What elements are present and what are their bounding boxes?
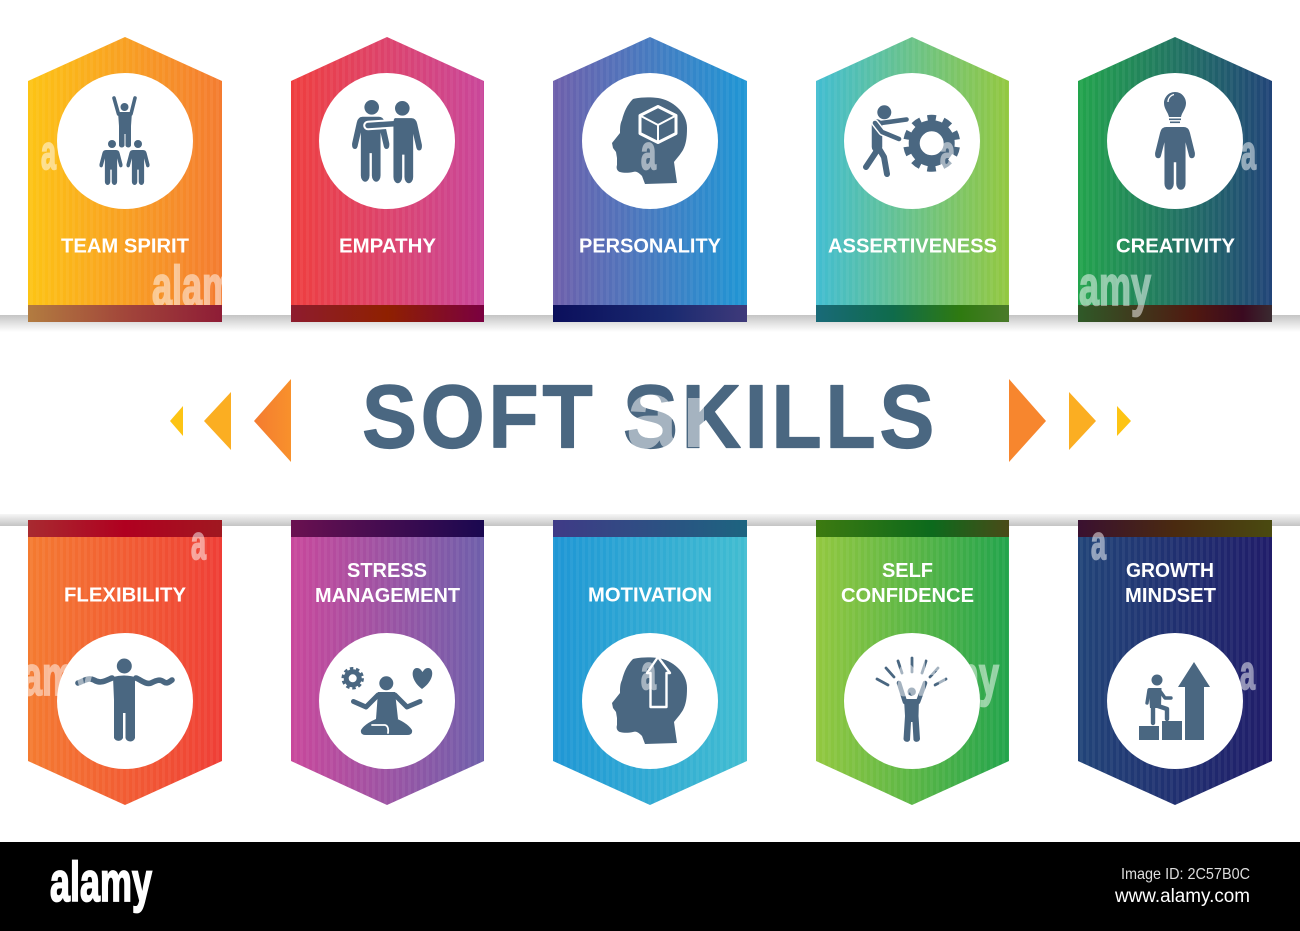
label: self confidence: SELF xyxy=(882,560,933,582)
icon: person pushing gear xyxy=(866,105,961,174)
watermark overlay: a xyxy=(641,127,656,180)
label: motivation: MOTIVATION xyxy=(588,584,712,606)
watermark overlay: a xyxy=(41,127,56,180)
top shadow band xyxy=(0,315,1300,332)
icon: three people stacked xyxy=(99,98,150,185)
panel: stress management xyxy=(291,520,484,805)
label: stress management: MANAGEMENT xyxy=(315,585,460,607)
watermark overlay xyxy=(0,127,1256,707)
watermark overlay: a xyxy=(191,517,206,570)
label: self confidence xyxy=(841,560,974,607)
label: growth mindset: MINDSET xyxy=(1125,585,1216,607)
panel: personality xyxy=(553,37,747,322)
watermark overlay: a xyxy=(1240,647,1255,700)
icon: person with arm around another xyxy=(352,100,422,183)
icon: person raising arms with rays xyxy=(877,658,946,742)
watermark overlay: a xyxy=(940,127,955,180)
label: stress management: STRESS xyxy=(347,560,427,582)
label: self confidence: CONFIDENCE xyxy=(841,585,974,607)
watermark overlay: alamy xyxy=(1049,254,1151,317)
panel: self confidence xyxy=(816,520,1009,805)
label: stress management xyxy=(315,560,460,607)
icon: head with cube xyxy=(612,97,687,184)
watermark overlay: a xyxy=(627,361,678,468)
label: flexibility: FLEXIBILITY xyxy=(64,584,187,606)
panel: assertiveness xyxy=(816,37,1009,322)
label: growth mindset xyxy=(1125,560,1216,607)
label: assertiveness: ASSERTIVENESS xyxy=(828,236,997,258)
panel: empathy xyxy=(291,37,484,322)
icon: person with light bulb head xyxy=(1155,92,1195,190)
label: personality: PERSONALITY xyxy=(579,236,722,258)
footer website: www.alamy.com xyxy=(1114,886,1250,907)
arrows: left chevrons xyxy=(170,379,291,462)
icon: meditating person with gear and heart xyxy=(343,668,432,735)
icon: person climbing steps with arrow xyxy=(1139,662,1210,740)
footer bar xyxy=(0,842,1300,931)
label: growth mindset: GROWTH xyxy=(1126,560,1214,582)
bottom shadow band xyxy=(0,514,1300,526)
watermark overlay: a xyxy=(1241,127,1256,180)
icon: person with wavy arms xyxy=(78,658,172,741)
panel: motivation xyxy=(553,520,747,805)
panel: team spirit xyxy=(28,37,222,322)
panel: creativity xyxy=(1078,37,1272,322)
footer logo: alamy xyxy=(50,850,152,913)
label: empathy: EMPATHY xyxy=(339,236,437,258)
watermark overlay: alamy xyxy=(897,644,999,707)
arrows: right chevrons xyxy=(1009,379,1131,462)
icon: head with up arrow xyxy=(612,657,687,744)
title: SOFT SKILLS xyxy=(362,368,938,468)
label: team spirit: TEAM SPIRIT xyxy=(61,236,189,258)
panel: growth mindset xyxy=(1078,520,1272,805)
panel: flexibility xyxy=(28,520,222,805)
watermark overlay: a xyxy=(1091,517,1106,570)
label: creativity: CREATIVITY xyxy=(1116,236,1236,258)
footer image id: Image ID: 2C57B0C xyxy=(1121,866,1250,883)
watermark overlay: alamy xyxy=(152,254,254,317)
watermark overlay: a xyxy=(641,647,656,700)
